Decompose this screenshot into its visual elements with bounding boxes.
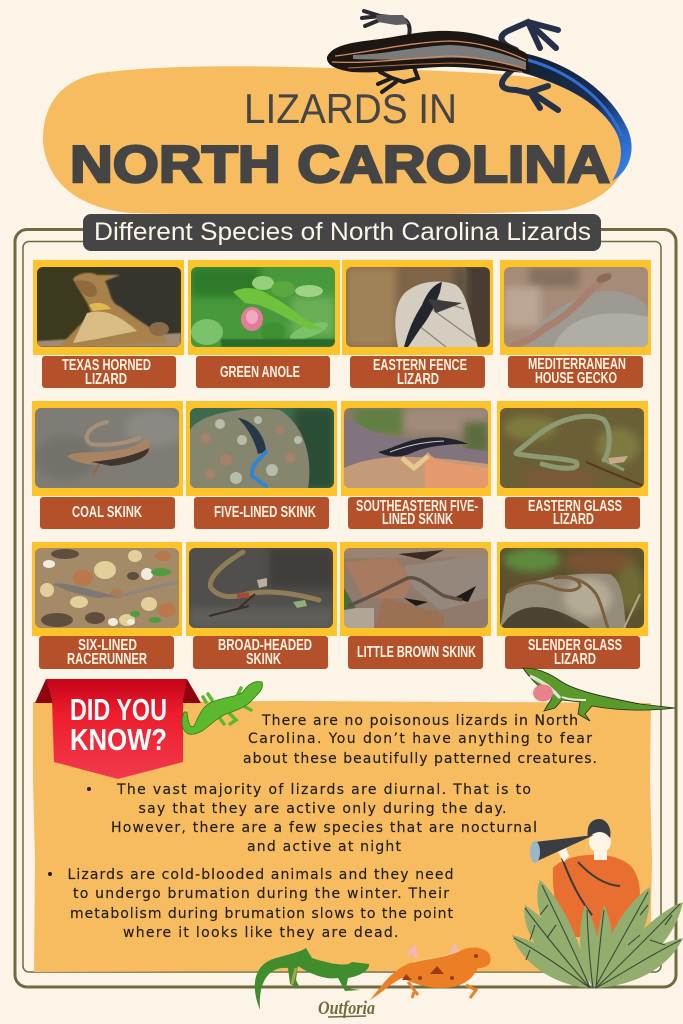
species card: broad-headed skink [186,542,337,669]
label: coal skink [40,497,175,529]
title line 2: NORTH CAROLINA [70,136,610,194]
label: little brown skink: LITTLE BROWN SKINK [357,644,477,661]
label: green anole: GREEN ANOLE [220,364,300,381]
label: slender glass lizard: SLENDER GLASS [528,637,622,654]
fact 2: The vast majority of lizards are diurnal. That is to [116,782,531,798]
species header pill [83,214,601,251]
fact 3 [48,867,454,941]
title [70,85,610,194]
fact 2 [87,782,537,855]
label: coal skink: COAL SKINK [72,504,143,521]
title blob background [43,66,628,215]
label: Texas horned lizard: TEXAS HORNED [62,357,151,374]
fact 1: about these beautifully patterned creatures. [243,751,597,767]
label: eastern fence lizard [350,356,485,388]
fact 2: and active at night [247,839,402,855]
label: broad-headed skink: BROAD-HEADED [218,637,312,654]
did you know ribbon: KNOW? [70,722,167,757]
icon: green lizard bottom [255,948,369,1010]
label: Mediterranean house gecko [508,356,643,388]
label: Texas horned lizard [42,356,176,388]
label: six-lined racerunner: SIX-LINED [78,637,137,654]
label: little brown skink [348,636,483,669]
label: six-lined racerunner: RACERUNNER [67,651,147,668]
species header text: Different Species of North Carolina Lizards [94,218,591,246]
icon: green anole with dewlap [523,668,675,721]
label: southeastern five-lined skink: SOUTHEASTERN FIVE- [356,498,478,515]
label: green anole [196,356,330,388]
label: southeastern five-lined skink: LINED SKINK [382,511,454,528]
label: Mediterranean house gecko: MEDITERRANEAN [528,356,626,373]
label: slender glass lizard: LIZARD [554,651,596,668]
fact 1 [243,713,597,767]
species card: Texas horned lizard [33,260,184,388]
label: five-lined skink: FIVE-LINED SKINK [214,504,317,521]
species card: eastern fence lizard [342,260,493,388]
label: eastern glass lizard: EASTERN GLASS [528,498,622,515]
species card: six-lined racerunner [32,542,182,669]
species card: Mediterranean house gecko [500,260,651,388]
icon: plant [512,880,683,988]
icon: green gecko by ribbon [182,681,263,734]
panel: did you know facts [33,701,652,972]
label: eastern fence lizard: EASTERN FENCE [373,357,467,374]
label: Texas horned lizard: LIZARD [85,371,127,388]
species card: little brown skink [340,542,491,669]
fact 3: Lizards are cold-blooded animals and they need [68,867,454,883]
label: eastern glass lizard [505,497,640,529]
icon: five-lined skink on title [327,11,632,181]
label: eastern fence lizard: LIZARD [397,371,439,388]
species card: green anole [188,260,340,388]
label: southeastern five-lined skink [348,497,483,529]
title line 1: LIZARDS IN [244,85,457,132]
fact 3: to undergo brumation during the winter. Their [73,886,449,902]
species card: five-lined skink [186,401,337,529]
did you know ribbon [35,679,201,779]
fact 2: However, there are a few species that are nocturnal [111,820,537,836]
inner frame [23,242,661,972]
icon: orange newt bottom [370,947,491,1000]
species card: eastern glass lizard [497,401,648,529]
fact 3: where it looks like they are dead. [123,925,398,941]
fact 1: There are no poisonous lizards in North [261,713,578,729]
fact 3: metabolism during brumation slows to the point [70,906,454,922]
logo: Outforia: Outforia [318,998,375,1019]
label: Mediterranean house gecko: HOUSE GECKO [535,370,617,387]
label: broad-headed skink [193,636,328,669]
label: slender glass lizard [505,636,640,669]
icon: person with telescope [530,819,640,937]
species card: slender glass lizard [497,542,648,669]
fact text [48,713,597,941]
species card: southeastern five-lined skink [341,401,491,529]
label: broad-headed skink: SKINK [246,651,282,668]
fact 1: Carolina. You don’t have anything to fear [248,731,592,747]
fact 2: say that they are active only during the day. [138,801,506,817]
label: six-lined racerunner [39,636,174,669]
species card: coal skink [32,401,185,529]
outer frame [15,230,676,987]
did you know ribbon: DID YOU [70,692,167,727]
label: five-lined skink [194,497,329,529]
label: eastern glass lizard: LIZARD [553,511,594,528]
